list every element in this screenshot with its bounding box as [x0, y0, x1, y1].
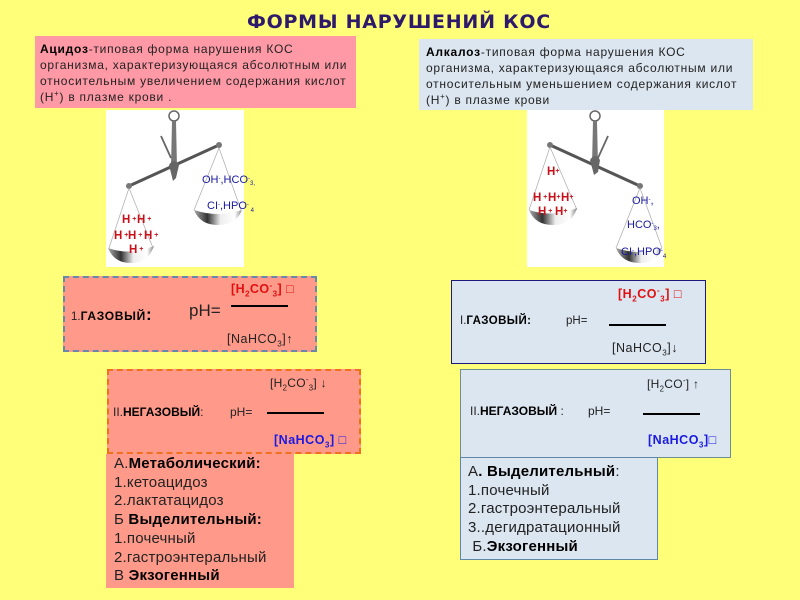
illustration: acidosis balance scale: CI [207, 200, 218, 212]
panel: acidosis subtypes list: А.Метаболический: [114, 455, 261, 472]
illustration: acidosis balance scale: ,HPO [220, 200, 247, 212]
panel: alkalosis gas form: I.ГАЗОВЫЙ: [460, 315, 531, 327]
illustration: alkalosis balance scale: + [563, 208, 567, 215]
panel: alkalosis subtypes list: 1.почечный [468, 482, 550, 499]
text: 4 [249, 208, 255, 214]
illustration: alkalosis balance scale: - [648, 197, 650, 203]
panel: alkalosis definition [419, 39, 753, 110]
text: - [247, 202, 249, 208]
panel: acidosis subtypes list: Б Выделительный: [114, 511, 262, 528]
illustration: alkalosis balance scale [527, 110, 667, 267]
illustration: acidosis balance scale: + [145, 216, 151, 223]
panel: alkalosis subtypes list: Б.Экзогенный [472, 538, 578, 555]
panel: acidosis gas form: [NaHCO3]↑ [227, 332, 293, 348]
panel: acidosis gas form: [H2CO- 3] □ [231, 281, 294, 298]
illustration: alkalosis balance scale: HCO [627, 219, 651, 231]
illustration: alkalosis balance scale: H [533, 192, 541, 204]
panel: acidosis gas form: pH= [189, 301, 221, 320]
panel: alkalosis non-gas form: II.НЕГАЗОВЫЙ : [470, 404, 564, 418]
panel: alkalosis subtypes list [460, 457, 658, 560]
illustration: alkalosis balance scale: H [548, 192, 556, 204]
panel: alkalosis definition: Алкалоз-типовая форма нарушения КОС [426, 45, 686, 59]
text: 3, [250, 181, 255, 187]
panel: alkalosis definition: организма, характеризующаяся абсолютным или [426, 61, 733, 75]
title: ФОРМЫ НАРУШЕНИЙ КОС [247, 11, 551, 33]
illustration: acidosis balance scale: - [218, 176, 220, 182]
panel: alkalosis subtypes list: А. Выделительный: [468, 463, 620, 480]
illustration: acidosis balance scale: + [130, 216, 136, 223]
panel: acidosis subtypes list [106, 454, 294, 588]
panel: acidosis subtypes list: 1.кетоацидоз [114, 474, 208, 491]
illustration: acidosis balance scale: + [122, 232, 128, 239]
panel: acidosis definition: организма, характеризующаяся абсолютным или [40, 58, 347, 72]
illustration: alkalosis balance scale: H [555, 206, 563, 218]
panel: alkalosis subtypes list: 2.гастроэнтеральный [468, 500, 621, 517]
illustration: alkalosis balance scale: + [569, 194, 573, 201]
illustration: alkalosis balance scale: , [657, 219, 660, 231]
illustration: alkalosis balance scale: + [555, 168, 559, 175]
illustration: acidosis balance scale: H [144, 230, 152, 242]
panel: acidosis definition [35, 36, 356, 108]
panel: alkalosis non-gas form: [NaHCO3]□ [648, 433, 717, 450]
panel: alkalosis gas form: [H2CO- 3] □ [618, 286, 682, 304]
illustration: alkalosis balance scale: 3 [653, 226, 657, 232]
illustration: acidosis balance scale: H [122, 214, 130, 226]
illustration: alkalosis balance scale: CI [621, 246, 632, 258]
illustration: alkalosis balance scale: - [632, 248, 634, 254]
panel: acidosis gas form [63, 276, 317, 352]
panel: alkalosis gas form [451, 280, 706, 364]
illustration: acidosis balance scale: H [114, 230, 122, 242]
illustration: acidosis balance scale [106, 110, 255, 267]
panel: acidosis definition: Ацидоз-типовая форма нарушения КОС [40, 42, 293, 56]
panel: alkalosis gas form: [NaHCO3]↓ [612, 341, 678, 358]
panel: alkalosis non-gas form [460, 369, 731, 458]
illustration: alkalosis balance scale: OH [632, 195, 648, 207]
illustration: acidosis balance scale: + [136, 232, 142, 239]
panel: acidosis definition: (Н+) в плазме крови . [40, 89, 172, 104]
panel: acidosis subtypes list: 2.гастроэнтеральный [114, 549, 267, 566]
panel: acidosis gas form: 1.ГАЗОВЫЙ: [71, 305, 152, 324]
text: - [248, 176, 250, 182]
illustration: acidosis balance scale: + [152, 232, 158, 239]
panel: alkalosis definition: (Н+) в плазме крови [426, 92, 550, 107]
illustration: alkalosis balance scale: ,HPO [634, 246, 661, 258]
illustration: acidosis balance scale: OH [202, 174, 218, 186]
panel: alkalosis non-gas form: [H2CO-] ↑ [647, 376, 699, 393]
illustration: acidosis balance scale: ,HCO [220, 174, 248, 186]
illustration: acidosis balance scale: H [129, 244, 137, 256]
panel: acidosis non-gas form [107, 369, 361, 454]
illustration: acidosis balance scale: - [218, 202, 220, 208]
panel: acidosis non-gas form: II.НЕГАЗОВЫЙ: [113, 405, 203, 419]
panel: acidosis non-gas form: [H2CO- 3] ↓ [270, 375, 327, 392]
illustration: alkalosis balance scale: + [546, 208, 552, 215]
panel: acidosis definition: относительным увеличением содержания кислот [40, 74, 346, 88]
panel: acidosis non-gas form: [NaHCO3] □ [274, 433, 347, 450]
panel: acidosis subtypes list: 1.почечный [114, 530, 196, 547]
illustration: alkalosis balance scale: + [556, 194, 560, 201]
text: 4 [663, 254, 667, 260]
illustration: alkalosis balance scale: , [650, 195, 654, 207]
illustration: alkalosis balance scale: - [651, 221, 653, 227]
panel: alkalosis non-gas form: pH= [588, 404, 610, 418]
panel: alkalosis definition: относительным уменьшением содержания кислот [426, 77, 737, 91]
illustration: alkalosis balance scale: H [547, 166, 555, 178]
panel: alkalosis gas form: pH= [566, 315, 587, 327]
illustration: alkalosis balance scale: + [541, 194, 547, 201]
illustration: alkalosis balance scale: H [538, 206, 546, 218]
illustration: acidosis balance scale: H [137, 214, 145, 226]
panel: acidosis non-gas form: pH= [230, 405, 252, 419]
panel: acidosis subtypes list: 2.лактатацидоз [114, 492, 224, 509]
panel: alkalosis subtypes list: 3..дегидратационный [468, 519, 621, 536]
illustration: alkalosis balance scale: H [561, 192, 569, 204]
illustration: acidosis balance scale: H [128, 230, 136, 242]
illustration: alkalosis balance scale: - [661, 248, 663, 254]
illustration: acidosis balance scale: + [137, 246, 143, 253]
panel: acidosis subtypes list: В Экзогенный [114, 567, 220, 584]
